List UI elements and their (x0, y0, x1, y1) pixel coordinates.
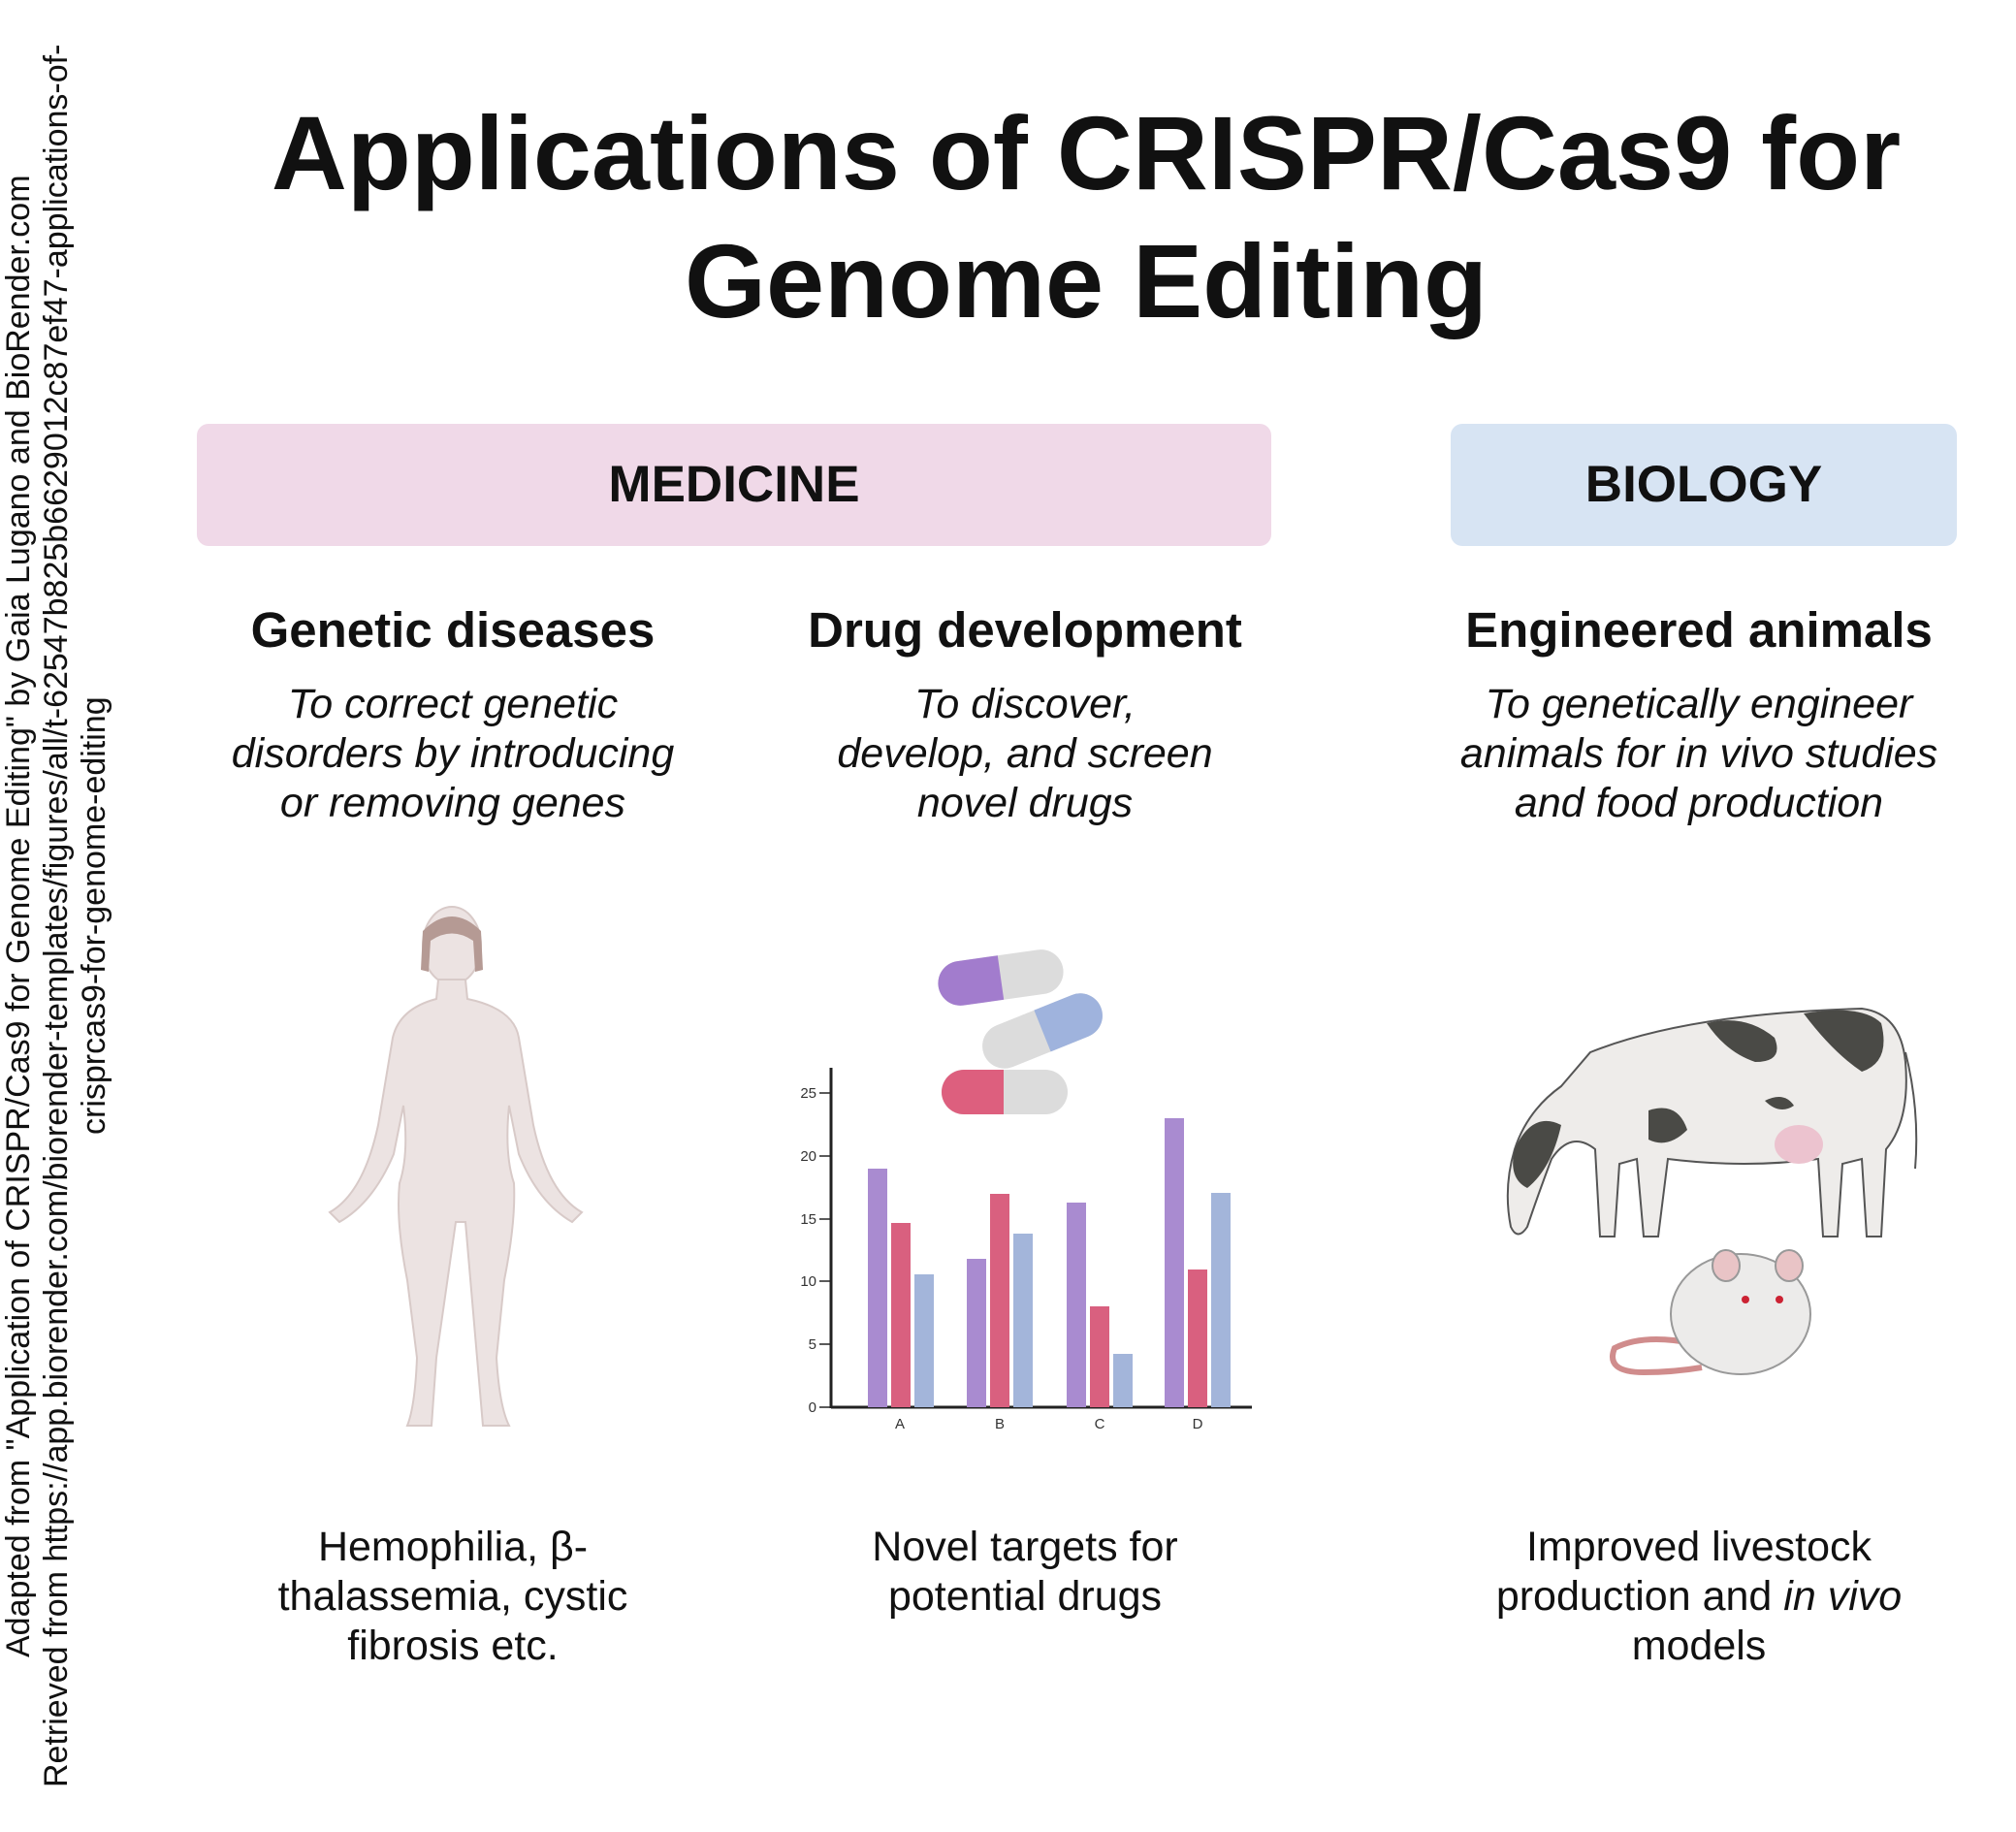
header: biology: BIOLOGY (1585, 456, 1822, 513)
title: Applications of CRISPR/Cas9 for (272, 94, 1901, 211)
column: genetic diseases (232, 602, 674, 826)
description: drug development: To discover, (914, 681, 1136, 727)
description: drug development: develop, and screen (837, 730, 1213, 777)
bottom text: genetic diseases: fibrosis etc. (347, 1623, 559, 1669)
header: medicine: MEDICINE (608, 456, 860, 513)
bottom text: engineered animals: production and in vivo (1496, 1573, 1902, 1620)
side credit text: crisprcas9-for-genome-editing (76, 697, 112, 1135)
bar chart: C (1095, 1416, 1105, 1432)
bar chart: A (895, 1416, 905, 1432)
side credit text: Adapted from "Application of CRISPR/Cas9 for Genome Editing" by Gaia Lugano and BioRender.com (0, 175, 37, 1657)
bar chart: 10 (800, 1273, 816, 1290)
title: Genome Editing (685, 222, 1488, 339)
bottom text: engineered animals (1496, 1524, 1902, 1669)
bottom text: drug development: Novel targets for (872, 1524, 1178, 1570)
bar chart: 20 (800, 1148, 816, 1165)
heading: engineered animals: Engineered animals (1465, 602, 1933, 658)
icon: cow (1507, 1008, 1918, 1237)
title (272, 94, 1901, 339)
bar chart: 5 (809, 1336, 816, 1353)
icon: rat (1610, 1249, 1811, 1375)
header: biology (1451, 424, 1957, 546)
description: genetic diseases: or removing genes (280, 780, 625, 826)
side credit text (0, 45, 112, 1787)
bottom text: engineered animals: models (1632, 1623, 1766, 1669)
bottom text: drug development (872, 1524, 1178, 1620)
header: medicine (197, 424, 1271, 546)
description: engineered animals: animals for in vivo studies (1460, 730, 1937, 777)
description: drug development: novel drugs (917, 780, 1133, 826)
heading: genetic diseases: Genetic diseases (251, 602, 655, 658)
description: engineered animals (1460, 681, 1937, 826)
icon: pills (938, 949, 1103, 1114)
column: drug development (808, 602, 1242, 826)
bar chart: B (995, 1416, 1005, 1432)
description: genetic diseases (232, 681, 674, 826)
bar chart: 25 (800, 1085, 816, 1102)
bottom text: genetic diseases: thalassemia, cystic (278, 1573, 627, 1620)
description: genetic diseases: To correct genetic (288, 681, 618, 727)
bar chart: 15 (800, 1211, 816, 1228)
description: genetic diseases: disorders by introducing (232, 730, 674, 777)
icon: human figure (328, 906, 584, 1427)
bottom text: genetic diseases: Hemophilia, β- (318, 1524, 588, 1570)
description: engineered animals: To genetically engineer (1486, 681, 1912, 727)
bar chart: 0 (809, 1399, 816, 1416)
bottom text: genetic diseases (278, 1524, 627, 1669)
column: engineered animals (1460, 602, 1937, 826)
bottom text: engineered animals: Improved livestock (1526, 1524, 1872, 1570)
side credit text: Retrieved from https://app.biorender.com/biorender-templates/figures/all/t-62547b825b6629012c87ef47-applications-of- (38, 45, 75, 1787)
heading: drug development: Drug development (808, 602, 1242, 658)
bar chart: D (1193, 1416, 1203, 1432)
bottom text: drug development: potential drugs (888, 1573, 1162, 1620)
description: drug development (837, 681, 1213, 826)
description: engineered animals: and food production (1515, 780, 1883, 826)
bar chart (800, 1068, 1252, 1432)
